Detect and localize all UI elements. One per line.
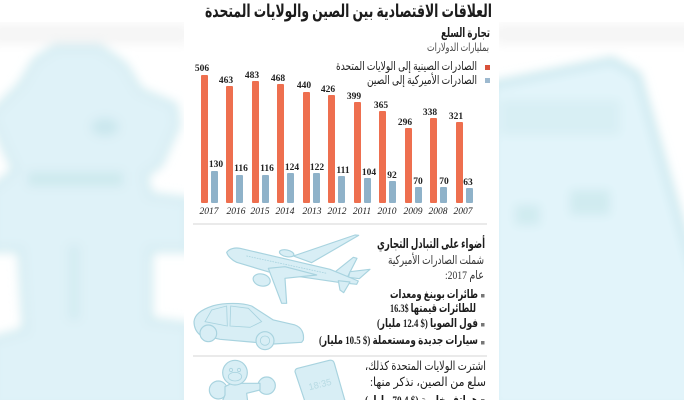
US values: 130 xyxy=(209,160,223,170)
legend: US exports: الصادرات الأميركية إلى الصين xyxy=(367,72,477,88)
imports intro: سلع من الصين، نذكر منها: xyxy=(370,375,486,390)
icon: smartphone: 18:35 xyxy=(307,377,333,392)
item: cars: سيارات جديدة ومستعملة ($ 10.5 مليار) xyxy=(319,333,478,348)
China values: 463 xyxy=(219,76,233,86)
US values: 70 xyxy=(413,177,423,187)
year axis: 2008 xyxy=(428,207,448,217)
US bars xyxy=(211,171,473,203)
China values: 483 xyxy=(245,71,259,81)
China values: 296 xyxy=(398,118,412,128)
US values: 116 xyxy=(260,164,274,174)
item: soybeans: فول الصويا ($ 12.4 مليار) xyxy=(377,316,478,331)
China values: 468 xyxy=(271,74,285,84)
year axis: 2014 xyxy=(276,207,295,217)
legend xyxy=(336,59,490,88)
highlights intro xyxy=(388,252,484,282)
highlights heading: أضواء على التبادل التجاري xyxy=(377,235,485,251)
US values: 124 xyxy=(285,163,299,173)
China values: 321 xyxy=(449,112,463,122)
chart heading: تجارة السلع xyxy=(441,25,490,40)
US values: 70 xyxy=(439,177,449,187)
imports intro xyxy=(365,359,486,390)
icon: smartphone xyxy=(295,360,347,400)
year axis xyxy=(200,207,474,217)
icon: airplane xyxy=(227,235,370,303)
China values: 506 xyxy=(195,64,209,74)
year axis: 2017 xyxy=(200,207,220,217)
highlights intro: شملت الصادرات الأميركية xyxy=(388,252,484,268)
China values: 338 xyxy=(423,108,437,118)
US values xyxy=(209,160,473,188)
year axis: 2011 xyxy=(353,207,371,217)
year axis: 2009 xyxy=(404,207,423,217)
item: Boeing aircraft: للطائرات قيمتها ‪16.3$‬ xyxy=(390,301,476,315)
US export list xyxy=(319,287,484,348)
China values: 426 xyxy=(321,85,335,95)
US values: 111 xyxy=(336,166,350,176)
year axis: 2016 xyxy=(226,207,246,217)
imports intro: اشترت الولايات المتحدة كذلك، xyxy=(365,359,486,374)
China values: 440 xyxy=(297,81,311,91)
item: Boeing aircraft xyxy=(390,287,484,315)
blurred background: phone xyxy=(490,24,684,400)
US values: 122 xyxy=(310,163,324,173)
highlights intro: عام 2017: xyxy=(445,268,484,282)
title: العلاقات الاقتصادية بين الصين والولايات المتحدة xyxy=(205,1,492,22)
centre panel xyxy=(184,0,499,400)
US values: 116 xyxy=(234,164,248,174)
year axis: 2010 xyxy=(378,207,397,217)
bar chart xyxy=(195,64,474,217)
US values: 104 xyxy=(362,168,376,178)
China values: 365 xyxy=(374,101,388,111)
year axis: 2007 xyxy=(454,207,474,217)
icon: car xyxy=(194,303,304,350)
blurred background: toy monkey xyxy=(0,24,190,400)
year axis: 2013 xyxy=(302,207,322,217)
China bars xyxy=(201,75,463,203)
China values xyxy=(195,64,463,128)
US values: 63 xyxy=(463,178,473,188)
icon: toy monkey xyxy=(209,360,275,400)
chart unit: بمليارات الدولارات xyxy=(427,42,489,54)
legend: Chinese exports: الصادرات الصينية إلى الولايات المتحدة xyxy=(336,59,477,74)
US values: 92 xyxy=(387,171,397,181)
year axis: 2012 xyxy=(328,207,347,217)
China values: 399 xyxy=(347,92,361,102)
item: Boeing aircraft: طائرات بوينغ ومعدات xyxy=(390,287,478,302)
year axis: 2015 xyxy=(250,207,270,217)
